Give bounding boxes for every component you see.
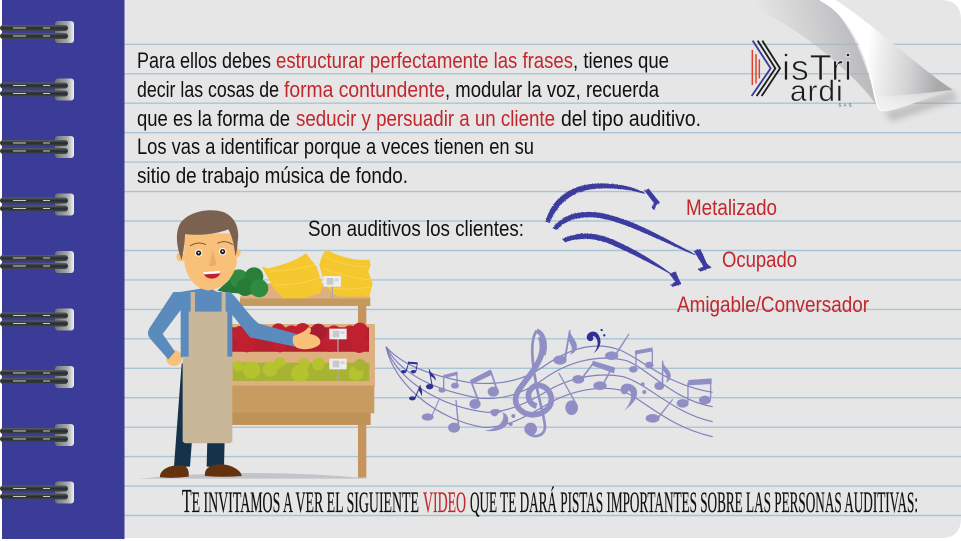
logo: Distri Ardi: ardi — [790, 75, 843, 108]
beamed notes D — [629, 347, 654, 373]
beamed notes C — [572, 361, 615, 390]
ring 2 — [0, 78, 74, 100]
small eighth note — [409, 385, 422, 400]
price tags — [323, 276, 347, 382]
intro paragraph: forma contundente — [284, 77, 445, 102]
ring 1 — [0, 21, 74, 43]
staff lines — [386, 346, 713, 437]
option: Ocupado: Ocupado — [722, 247, 797, 272]
page curl — [735, 0, 958, 122]
closing invitation — [182, 483, 918, 520]
spine — [2, 0, 124, 539]
intro paragraph: estructurar perfectamente las frases — [276, 48, 573, 73]
intro paragraph: seducir y persuadir a un cliente — [296, 106, 555, 131]
beamed notes A — [438, 372, 459, 393]
bananas — [262, 250, 373, 298]
ring 9 — [0, 482, 74, 504]
closing invitation: VIDEO — [423, 486, 466, 519]
eighth note — [426, 369, 436, 389]
ring 6 — [0, 308, 74, 330]
quarter note down — [558, 373, 578, 415]
intro paragraph — [137, 48, 701, 188]
intro paragraph: Para ellos debes — [137, 48, 271, 73]
logo: Distri Ardi: SAS — [838, 103, 852, 108]
eighth note — [553, 330, 577, 365]
apples — [232, 323, 369, 353]
stand — [230, 283, 375, 478]
music staff with notes — [386, 329, 713, 437]
arrow to Amigable — [563, 234, 681, 286]
intro paragraph: que es la forma de — [137, 106, 290, 131]
arrows — [546, 184, 711, 286]
intro paragraph: Los vas a identificar porque a veces tienen en su — [137, 134, 534, 159]
intro paragraph: del tipo auditivo. — [561, 106, 701, 131]
small beamed notes — [401, 362, 418, 373]
intro paragraph: , tienes que — [573, 48, 669, 73]
option: Amigable/Conversador: Amigable/Conversador — [677, 292, 869, 317]
beamed notes E — [677, 378, 712, 408]
ring 3 — [0, 136, 74, 158]
logo: Distri Ardi — [752, 41, 852, 108]
ring 8 — [0, 424, 74, 446]
intro paragraph: , modular la voz, recuerda — [445, 77, 660, 102]
treble clef — [516, 331, 551, 436]
eighth note right — [654, 361, 671, 390]
ring 4 — [0, 194, 74, 216]
intro paragraph: sitio de trabajo música de fondo. — [137, 163, 408, 188]
arrow to Ocupado — [553, 212, 711, 271]
ring 7 — [0, 366, 74, 388]
illustration: vendor and fruit stand — [138, 210, 375, 479]
vendor — [148, 210, 320, 478]
ground shadow — [138, 473, 371, 479]
dark bass clef — [587, 329, 605, 353]
light notes — [422, 330, 712, 436]
option: Metalizado: Metalizado — [686, 195, 777, 220]
bass clef right — [621, 382, 646, 411]
arrow to Metalizado — [546, 184, 659, 222]
bass clef — [484, 409, 515, 431]
beamed notes B — [469, 369, 499, 409]
ruled lines — [124, 44, 961, 516]
greens — [217, 267, 268, 297]
pears — [233, 357, 369, 382]
dark notes — [401, 329, 605, 400]
quarter note up — [605, 333, 630, 360]
closing invitation: TE INVITAMOS A VER EL SIGUIENTE — [182, 483, 419, 520]
quarter note right — [646, 399, 673, 423]
label: son auditivos: Son auditivos los clientes: — [308, 216, 524, 241]
spiral binding — [0, 21, 74, 504]
logo: Distri Ardi: isTri — [782, 47, 852, 88]
ring 5 — [0, 251, 74, 273]
quarter notes — [422, 398, 460, 433]
intro paragraph: decir las cosas de — [137, 77, 279, 102]
